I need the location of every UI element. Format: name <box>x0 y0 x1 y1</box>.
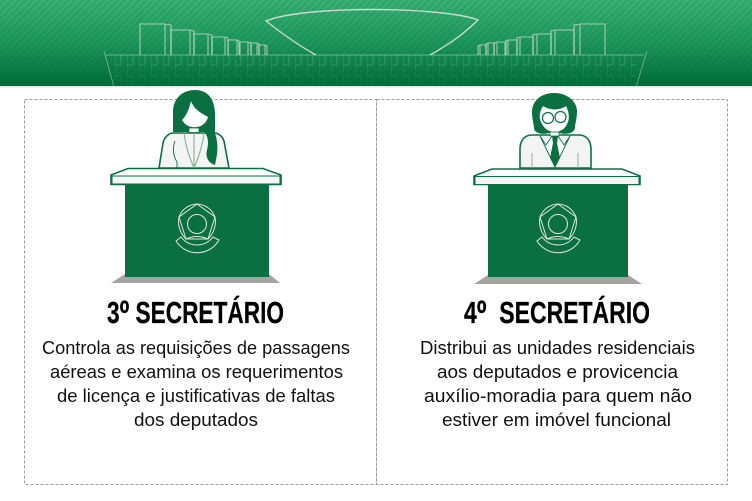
text: 3rd secretary description: aéreas e examina os requerimentos <box>50 362 343 382</box>
text: 4th secretary description: aos deputados e provicencia <box>437 362 679 382</box>
text: 4th secretary description: Distribui as unidades residenciais <box>420 338 695 358</box>
panel: 3rd secretary <box>24 90 376 484</box>
heading: 3rd secretary: SECRETÁRIO <box>129 295 284 330</box>
desk <box>474 169 642 284</box>
heading: 4th secretary: 4 <box>464 295 481 330</box>
text: 3rd secretary description: dos deputados <box>134 410 258 430</box>
text: 3rd secretary description: de licença e justificativas de faltas <box>57 386 335 406</box>
panel: 4th secretary <box>376 93 728 484</box>
heading: 4th secretary: SECRETÁRIO <box>487 295 650 330</box>
text: 4th secretary description: auxílio-moradia para quem não <box>424 386 692 406</box>
header banner <box>0 0 752 88</box>
text: 4th secretary description: estiver em imóvel funcional <box>442 410 671 430</box>
icon: person with glasses and tie <box>520 93 591 168</box>
text: 4th secretary description <box>420 338 695 430</box>
heading: 3rd secretary: 3 <box>107 295 124 330</box>
heading: 4th secretary: º <box>477 293 487 334</box>
icon: coat of arms <box>537 204 580 253</box>
icon: woman with long hair <box>159 90 229 168</box>
icon: coat of arms <box>176 204 219 253</box>
desk <box>111 168 281 283</box>
text: 3rd secretary description <box>42 338 350 430</box>
illustration: congress building <box>104 10 647 87</box>
heading: 3rd secretary: º <box>120 293 129 334</box>
text: 3rd secretary description: Controla as requisições de passagens <box>42 338 350 358</box>
